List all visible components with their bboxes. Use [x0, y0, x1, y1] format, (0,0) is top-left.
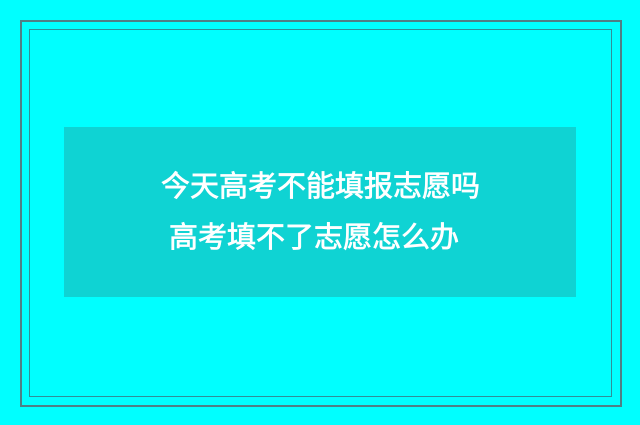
heading: line 2: 高考填不了志愿怎么办 [169, 222, 459, 254]
panel: title background [64, 127, 576, 297]
heading: line 1: 今天高考不能填报志愿吗 [161, 171, 480, 203]
inner frame [29, 29, 612, 397]
